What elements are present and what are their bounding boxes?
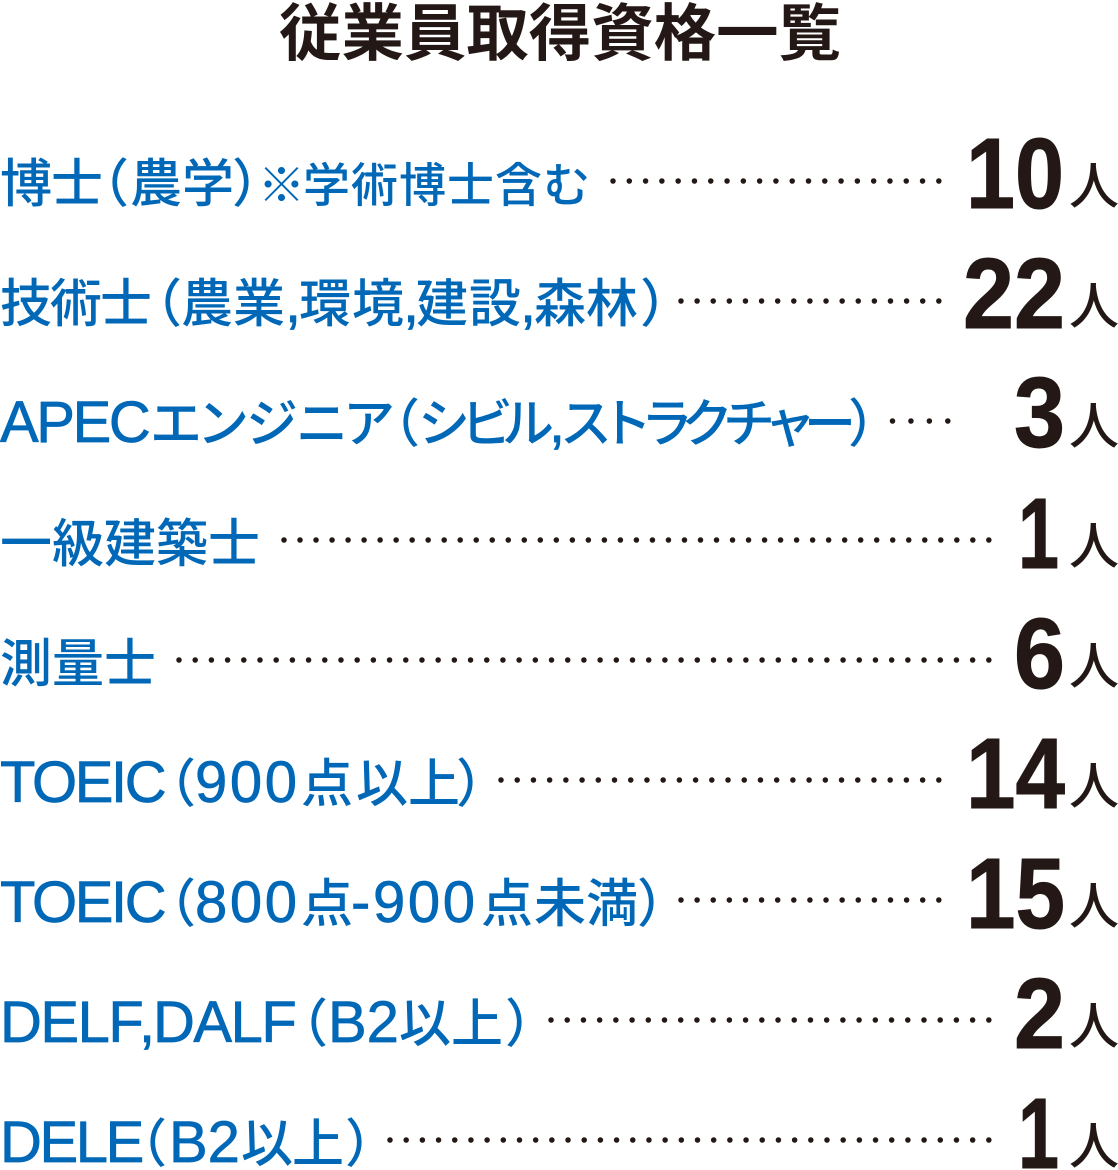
title: 従業員取得資格一覧 — [279, 0, 841, 69]
row: 測量士 — [0, 598, 1118, 710]
unit: 人 — [1069, 267, 1118, 339]
row: TOEIC 800 — [0, 838, 1118, 950]
unit: 人 — [1069, 507, 1118, 579]
leader dots — [892, 418, 948, 424]
label: 一級建築士 — [0, 516, 260, 574]
label: 森林） — [534, 276, 692, 334]
label: 環境 — [299, 276, 404, 334]
count: 1 — [1018, 478, 1059, 590]
unit: 人 — [1069, 147, 1118, 219]
label: 900 — [373, 870, 478, 935]
label: TOEIC — [0, 870, 165, 935]
label: , — [549, 390, 563, 455]
label: 技術士（農業 — [0, 276, 285, 334]
count: 22 — [963, 238, 1065, 350]
leader dots — [179, 657, 989, 663]
row: APEC — [0, 357, 1118, 469]
row: TOEIC 900 — [0, 718, 1118, 830]
label: , — [139, 990, 154, 1055]
label: TOEIC — [0, 750, 165, 815]
label: 点以上） — [301, 756, 508, 814]
label: 点未満） — [481, 876, 689, 934]
label: （ — [144, 756, 196, 814]
label: 800 — [195, 870, 300, 935]
count: 15 — [966, 838, 1065, 950]
count: 14 — [966, 718, 1065, 830]
unit: 人 — [1069, 747, 1118, 819]
count: 3 — [1014, 357, 1065, 469]
unit: 人 — [1069, 387, 1118, 459]
leader dots — [390, 1137, 989, 1143]
label: ストラクチャー） — [560, 396, 900, 454]
leader dots — [681, 897, 939, 903]
leader dots — [613, 178, 939, 184]
label: , — [403, 270, 417, 335]
label: 建設 — [416, 276, 521, 334]
row: DELE — [0, 1078, 1118, 1170]
count: 6 — [1014, 598, 1065, 710]
label: エンジニア（シビル — [150, 396, 554, 454]
label: 測量士 — [0, 636, 156, 694]
unit: 人 — [1069, 987, 1118, 1059]
row: 博士 — [0, 118, 1118, 230]
label: - — [351, 870, 368, 935]
unit: 人 — [1069, 867, 1118, 939]
leader dots — [681, 298, 939, 304]
row: 技術士 — [0, 238, 1118, 350]
label: DELF — [0, 990, 142, 1055]
label: , — [285, 270, 299, 335]
row: DELF,DALF — [0, 958, 1118, 1070]
label: 900 — [195, 750, 300, 815]
label: 以上） — [399, 996, 557, 1054]
label: （ — [276, 996, 328, 1054]
leader dots — [551, 1017, 989, 1023]
label: 点 — [301, 876, 353, 934]
count: 2 — [1014, 958, 1065, 1070]
count: 10 — [966, 118, 1064, 230]
label: ※学術博士含む — [258, 159, 590, 212]
label: 博士（農学） — [0, 156, 284, 214]
row: 一級建築士 — [0, 478, 1118, 590]
label: （ — [144, 876, 196, 934]
leader dots — [501, 777, 939, 783]
label: , — [520, 270, 534, 335]
leader dots — [284, 537, 989, 543]
label: APEC — [0, 390, 149, 455]
label: DALF — [153, 990, 295, 1055]
label: B2 — [328, 990, 399, 1055]
unit: 人 — [1069, 627, 1118, 699]
